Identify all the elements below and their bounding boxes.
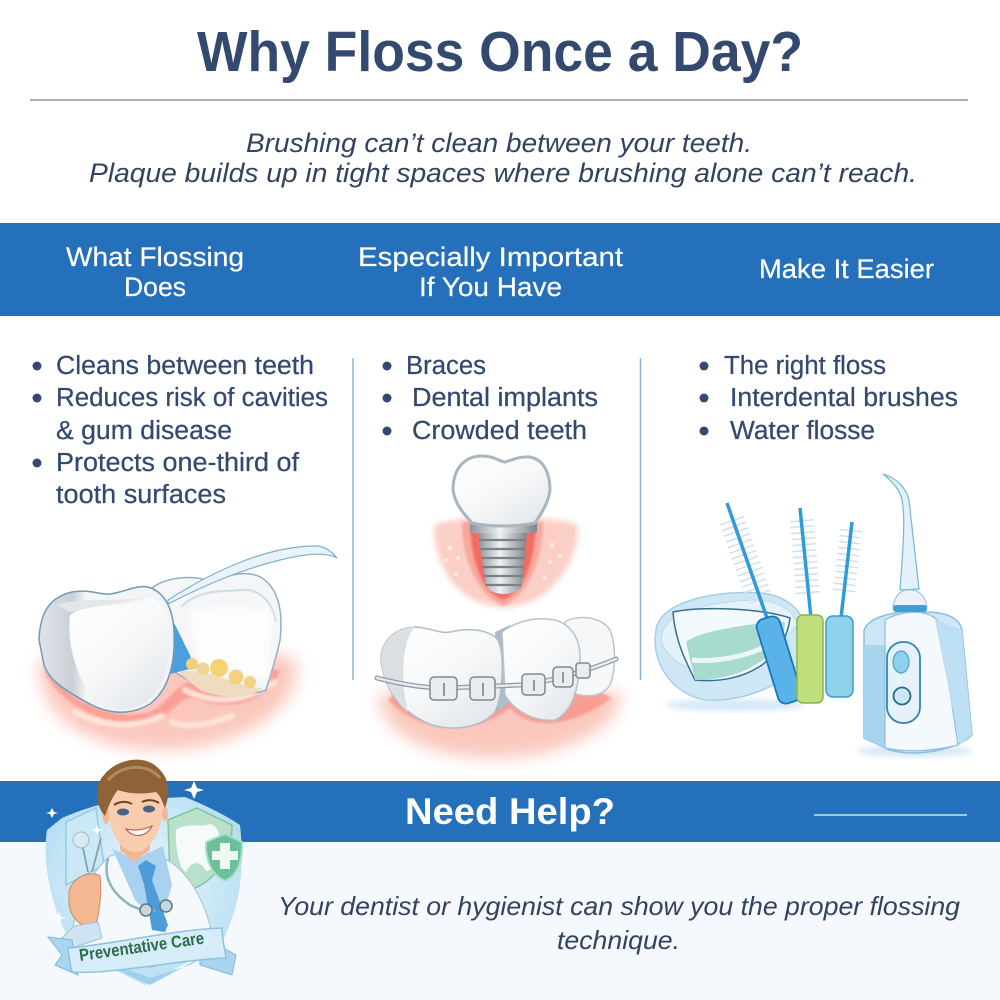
hair [97,760,168,816]
brush wires and bristles [727,503,852,618]
water flosser [857,474,973,757]
neck [120,838,150,862]
header band [0,223,1000,316]
smile [126,826,152,835]
list: make it easier: The right floss [724,352,886,380]
list: especially important if you have: Crowded teeth [412,417,587,445]
intro text: Brushing can’t clean between your teeth. [246,128,752,158]
floss container [655,592,805,711]
title: Why Floss Once a Day? [197,20,803,84]
list: what flossing does: Reduces risk of cavities [56,384,328,412]
heading: especially important [358,242,624,302]
heading: need help: Need Help? [405,791,615,832]
stethoscope and loupes [107,858,155,911]
illustration: teeth with floss and plaque [39,546,337,750]
illustration: teeth with braces [377,617,622,758]
dentist text: Your dentist or hygienist can show you the proper flossing [278,891,961,921]
collar [470,520,537,533]
small green shield [206,834,242,881]
hand [69,874,101,927]
list: what flossing does: & gum disease [56,417,232,445]
list: what flossing does [32,352,328,509]
list: especially important if you have: Braces [406,352,486,380]
bottom panel [0,842,1000,1000]
list: especially important if you have [382,352,598,445]
need help band [0,781,1000,842]
shadow between teeth [170,620,194,674]
shield background [46,797,242,985]
dental tools [73,832,89,848]
illustration: dental implant [434,456,578,607]
far tooth [565,617,614,696]
ribbon [48,937,78,975]
middle tooth [502,619,580,720]
dentist text [278,891,961,955]
heading: especially important: Especially Important [358,242,624,272]
eyes [117,808,129,816]
front tooth [39,587,174,712]
floss [168,546,337,604]
list: what flossing does: tooth surfaces [56,481,226,509]
back tooth [153,574,281,694]
gum [434,517,578,607]
sparkles [184,781,204,799]
intro text: Plaque builds up in tight spaces where brushing alone can’t reach. [89,158,917,188]
illustration: floss container, interdental brushes, water flosser [655,474,973,757]
shadow between teeth [495,625,512,712]
list: make it easier [700,352,958,445]
brush handles [755,614,803,706]
list: especially important if you have: Dental implants [412,384,598,412]
heading: what flossing does: Does [124,272,186,302]
plaque [178,658,262,697]
dentist text: technique. [557,925,680,955]
tie [138,860,168,932]
heading: what flossing does [66,242,244,302]
front tooth [381,627,502,728]
crown [453,456,550,526]
brackets [430,663,590,700]
heading: make it easier: Make It Easier [759,254,934,284]
heading: what flossing does: What Flossing [66,242,244,272]
list: make it easier: Water flosse [730,417,875,445]
gum [378,685,622,758]
screw [478,532,527,594]
badge text: Preventative Care [78,929,205,965]
intro text [89,128,917,188]
wire [377,659,616,688]
face [108,779,163,852]
list: what flossing does: Cleans between teeth [56,352,314,380]
heading: especially important: If You Have [419,272,562,302]
shirt [112,846,172,925]
gum [40,648,296,750]
list: what flossing does: Protects one-third of [56,449,300,477]
tooth shield [168,808,232,890]
list: make it easier: Interdental brushes [730,384,958,412]
badge: preventative care dentist [46,760,242,985]
coat [70,850,214,968]
